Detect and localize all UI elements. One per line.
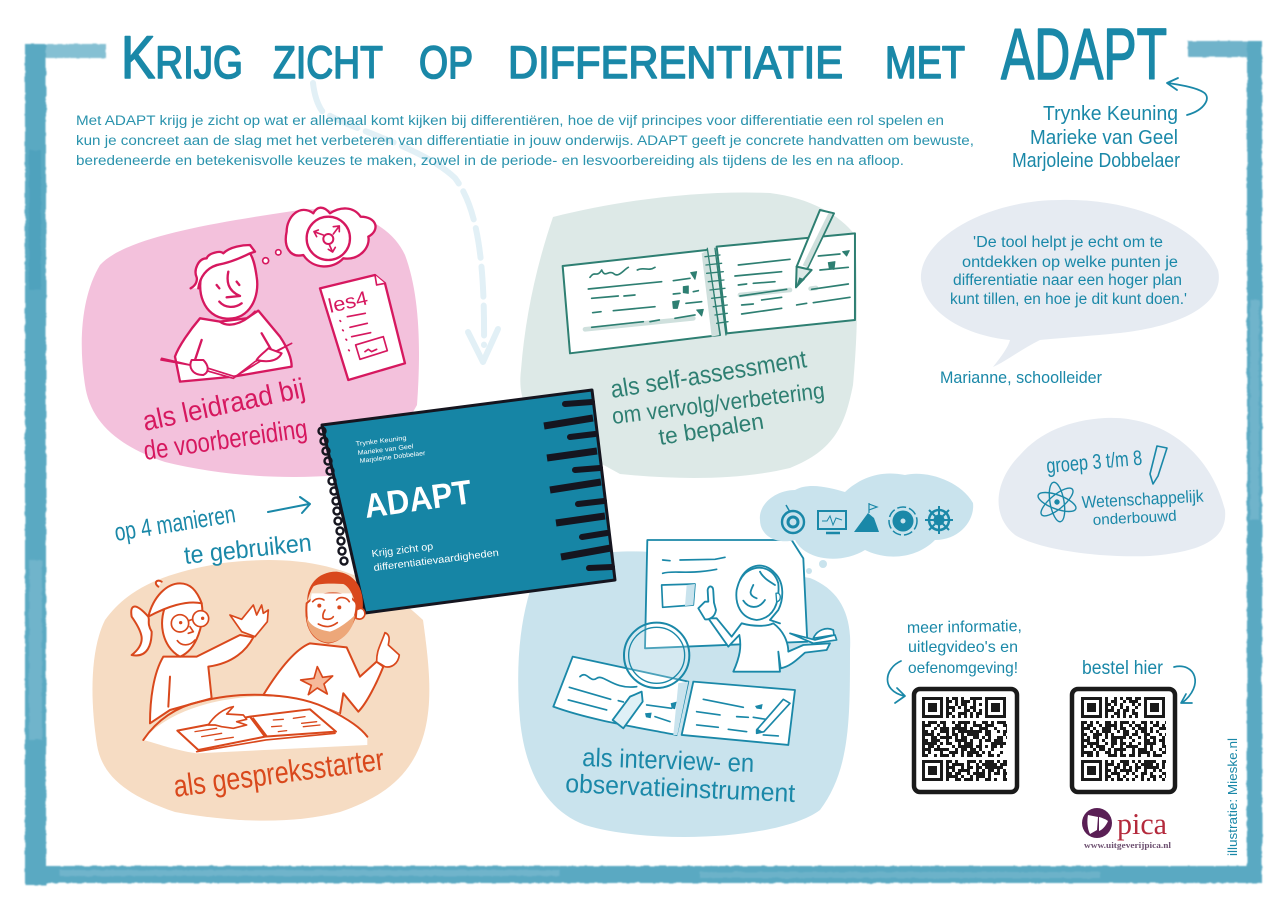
book authors: Marieke van Geel (357, 443, 414, 457)
authors with arrow: Marjoleine Dobbelaer (1012, 150, 1180, 172)
icon: mountain with flag (854, 503, 879, 532)
label: te bepalen: te bepalen (657, 408, 765, 450)
QR block: meer informatie: uitlegvideo's en (908, 639, 1018, 656)
label: als leidraad bij: als leidraad bij (140, 372, 308, 437)
panel: gespreksstarter (peach) (92, 560, 429, 821)
book authors: Marjoleine Dobbelaer (359, 450, 427, 465)
illustration: woman and man talking over notebook (131, 581, 399, 753)
book subtitle: Krijg zicht op (371, 541, 434, 560)
title: OP (419, 37, 473, 88)
authors with arrow (1012, 78, 1207, 172)
book authors (355, 435, 427, 465)
icon: pencil (1150, 446, 1167, 484)
logo: pica: pica (1117, 806, 1167, 841)
QR block: bestel hier (1072, 658, 1195, 792)
QR block: meer informatie: oefenomgeving! (908, 660, 1018, 677)
QR block: meer informatie (887, 618, 1022, 792)
authors with arrow: Trynke Keuning (1043, 103, 1178, 125)
label: groep 3 t/m 8: groep 3 t/m 8 (1045, 447, 1143, 478)
bubble: group and science-based (999, 418, 1225, 556)
book subtitle (371, 541, 499, 574)
intro text: kun je concreet aan de slag met het verbeteren van differentiatie in jouw onderwijs. ADAPT geeft je concrete handvatten om bewuste, (76, 133, 974, 148)
label: als interview- en: als interview- en (582, 742, 755, 778)
label: de voorbereiding: de voorbereiding (142, 413, 309, 466)
intro text: Met ADAPT krijg je zicht op wat er allemaal komt kijken bij differentiëren, hoe de vijf principes voor differentiatie een rol spelen en (76, 113, 944, 128)
title: DIFFERENTIATIE (508, 37, 843, 88)
intro text: beredeneerde en betekenisvolle keuzes te maken, zowel in de periode- en lesvoorbereiding als tijdens de les en na afloop. (76, 153, 904, 168)
icon: ship wheel (925, 506, 953, 534)
logo: pica (1082, 806, 1172, 850)
QR block: meer informatie: meer informatie, (907, 618, 1022, 637)
book authors: Trynke Keuning (355, 435, 407, 448)
quote attribution: Marianne, schoolleider (940, 369, 1102, 387)
authors with arrow: Marieke van Geel (1030, 127, 1178, 149)
quote text: differentiatie naar een hoger plan (953, 272, 1182, 289)
QR code (922, 698, 1007, 780)
quote text: kunt tillen, en hoe je dit kunt doen.' (950, 291, 1187, 308)
panel: interview en observatie (blue) (518, 474, 973, 837)
book subtitle: differentiatievaardigheden (373, 548, 499, 574)
label: om vervolg/verbetering: om vervolg/verbetering (610, 377, 826, 429)
title (121, 15, 1167, 95)
illustrator credit: illustratie: Mieske.nl (1226, 738, 1240, 856)
black index tabs (544, 402, 612, 568)
title: ADAPT (1001, 15, 1167, 95)
callout: op 4 manieren te gebruiken (113, 497, 313, 570)
illustration: teacher at board and notebook with magnifier (553, 540, 837, 745)
QR block: bestel hier: bestel hier (1082, 658, 1164, 679)
thought cloud with five principle icons (760, 474, 973, 574)
man's head over book corner (306, 572, 365, 643)
callout: op 4 manieren te gebruiken: op 4 manieren (113, 500, 237, 547)
label: als self-assessment: als self-assessment (609, 345, 809, 404)
label: wetenschappelijk onderbouwd (1081, 487, 1204, 529)
icon: monitor (818, 511, 846, 533)
label: als gespreksstarter: als gespreksstarter (171, 742, 386, 804)
callout: op 4 manieren te gebruiken: te gebruiken (183, 529, 313, 570)
logo: pica: www.uitgeverijpica.nl (1084, 840, 1172, 850)
dashed arrow to book (313, 83, 484, 345)
label: les 4: les4 (326, 287, 370, 318)
intro text (76, 113, 974, 168)
speech bubble: quote (921, 200, 1219, 367)
label: observatieinstrument: observatieinstrument (565, 768, 797, 808)
illustration: man reading with thought and lesson plan (161, 208, 405, 382)
illustration: open notebook with pencil (563, 210, 855, 353)
icon: atom (1036, 481, 1078, 523)
quote text: 'De tool helpt je echt om te (973, 234, 1163, 251)
quote text: ontdekken op welke punten je (962, 254, 1178, 271)
panel: self-assessment (green) (520, 192, 857, 478)
title: MET (885, 37, 965, 88)
quote text (950, 234, 1187, 308)
title: KRIJG (121, 24, 243, 91)
QR code (1081, 698, 1166, 780)
book: ADAPT cover (318, 390, 615, 613)
label: wetenschappelijk onderbouwd: onderbouwd (1092, 508, 1177, 529)
book title: ADAPT (362, 473, 474, 526)
label: wetenschappelijk onderbouwd: Wetenschappelijk (1081, 487, 1204, 512)
icon: differentiation circle (889, 507, 917, 535)
title: ZICHT (273, 37, 383, 88)
spiral binding (318, 428, 348, 564)
icon: target (782, 505, 804, 533)
panel: leidraad (pink) (82, 208, 419, 477)
